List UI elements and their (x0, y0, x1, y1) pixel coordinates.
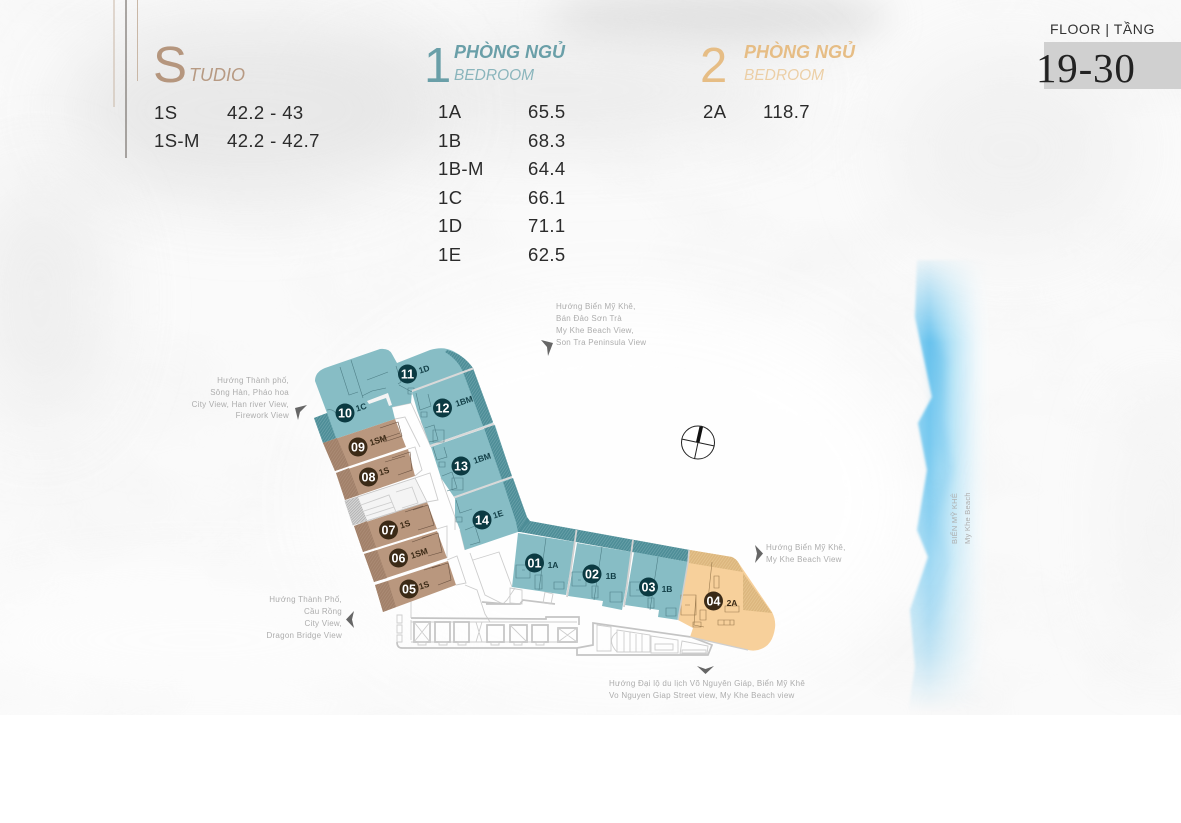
unit markers: 1BM (454, 394, 474, 409)
unit markers: 1S (378, 465, 391, 478)
studio areas: 1S-M (154, 130, 200, 151)
view label: Vo Nguyen Giap street: Hướng Đại lộ du lịch Võ Nguyên Giáp, Biển Mỹ Khê (609, 679, 805, 688)
panel: 1 bedroom legend (424, 39, 566, 265)
1 bedroom areas: 1A (438, 101, 462, 122)
unit markers: 13 (454, 460, 468, 474)
2 bedroom area: 118.7 (763, 101, 810, 122)
arrow: north-east view (541, 340, 553, 356)
view label: city and Han river: City View, Han river View, (192, 400, 289, 409)
beach label: BIỂN MỸ KHÊ (950, 493, 959, 544)
view label: Dragon Bridge: Cầu Rồng (304, 607, 342, 616)
units 01 02 03 (512, 517, 690, 620)
unit 11 1D (392, 348, 473, 407)
1 bedroom areas: 1E (438, 244, 461, 265)
unit markers: 06 (392, 552, 405, 566)
1 bedroom areas: 1D (438, 215, 462, 236)
unit markers: 04 (707, 594, 720, 608)
unit markers: 10 (338, 406, 352, 420)
heading: 1 bedroom: 1 (424, 39, 451, 93)
unit markers: 1SM (368, 433, 388, 448)
view label: Vo Nguyen Giap street (609, 679, 805, 700)
unit markers: 11 (401, 368, 414, 382)
unit markers: 05 (402, 582, 416, 596)
view label: Son Tra: My Khe Beach View, (556, 326, 634, 335)
view label: My Khe Beach (766, 543, 846, 564)
unit markers: 1D (417, 363, 431, 376)
unit markers: 01 (528, 556, 541, 570)
view label: Son Tra: Hướng Biển Mỹ Khê, (556, 302, 636, 311)
studio areas (154, 102, 320, 151)
heading: 2 bedroom: PHÒNG NGỦ (744, 41, 856, 62)
beach label (950, 492, 972, 544)
heading: 2 bedroom: BEDROOM (744, 67, 824, 84)
heading: 1 bedroom: BEDROOM (454, 67, 534, 84)
2 bedroom area: 2A (703, 101, 727, 122)
1 bedroom areas: 71.1 (528, 215, 566, 236)
stair and service walls (510, 588, 708, 654)
view label: Dragon Bridge: City View, (305, 619, 342, 628)
floor badge (1036, 21, 1181, 91)
view label: Dragon Bridge (266, 595, 342, 640)
1 bedroom areas: 62.5 (528, 244, 566, 265)
view label: Son Tra (556, 302, 646, 347)
lift lobby walls (397, 617, 712, 655)
unit markers: 12 (436, 402, 449, 416)
view label: Dragon Bridge: Dragon Bridge View (266, 631, 342, 640)
studio areas: 1S (154, 102, 177, 123)
view label: My Khe Beach: Hướng Biển Mỹ Khê, (766, 543, 846, 552)
1 bedroom areas: 64.4 (528, 158, 566, 179)
compass (682, 426, 714, 459)
heading: 1 bedroom (424, 39, 566, 93)
arrow: west view (346, 611, 354, 628)
sea watercolour (909, 260, 978, 703)
unit markers: 14 (475, 514, 489, 528)
units 12 13 14 and balcony strip (412, 368, 527, 550)
view label: city and Han river: Hướng Thành phố, (217, 376, 289, 385)
panel: studio legend (153, 36, 320, 151)
view label: Dragon Bridge: Hướng Thành Phố, (269, 595, 342, 604)
unit markers: 2A (727, 598, 737, 608)
view label: My Khe Beach: My Khe Beach View (766, 555, 842, 564)
unit markers: 07 (382, 524, 395, 538)
studio areas: 42.2 - 43 (227, 102, 304, 123)
heading: 1 bedroom: PHÒNG NGỦ (454, 41, 566, 62)
unit markers: 1B (606, 571, 616, 581)
unit markers: 09 (351, 440, 365, 454)
view label: Vo Nguyen Giap street: Vo Nguyen Giap Street view, My Khe Beach view (609, 691, 795, 700)
floor plan (314, 348, 775, 655)
1 bedroom areas: 66.1 (528, 187, 566, 208)
1 bedroom areas: 1B (438, 130, 461, 151)
unit markers: 1C (354, 401, 368, 414)
heading: 2 bedroom (700, 39, 856, 93)
unit 04 2A (678, 550, 775, 651)
floor badge: 19-30 (1036, 45, 1136, 91)
unit markers: 1BM (472, 451, 492, 466)
1 bedroom areas (438, 101, 566, 265)
studio areas: 42.2 - 42.7 (227, 130, 320, 151)
unit markers: 1E (492, 508, 505, 521)
1 bedroom areas: 1B-M (438, 158, 484, 179)
arrow: south view (697, 666, 714, 674)
panel: 2 bedroom legend (700, 39, 856, 122)
unit markers: 02 (585, 568, 599, 582)
unit markers: 03 (642, 580, 655, 594)
beach label: My Khe Beach (963, 492, 972, 544)
unit markers: 1SM (409, 546, 429, 561)
view label: city and Han river: Sông Hàn, Pháo hoa (210, 388, 289, 397)
stair core (345, 478, 427, 525)
heading: studio: S (153, 36, 187, 93)
2 bedroom area (703, 101, 810, 122)
view label: city and Han river: Firework View (236, 411, 289, 420)
heading: 2 bedroom: 2 (700, 39, 727, 93)
view label: Son Tra: Son Tra Peninsula View (556, 338, 646, 347)
unit markers: 08 (362, 470, 375, 484)
unit markers: 1A (548, 560, 558, 570)
unit markers: 1S (399, 518, 412, 531)
decorative vertical rules (114, 0, 138, 158)
view label: city and Han river (192, 376, 289, 420)
1 bedroom areas: 1C (438, 187, 462, 208)
unit markers (336, 363, 737, 610)
units 05 to 09 studio (323, 419, 456, 612)
1 bedroom areas: 68.3 (528, 130, 566, 151)
arrow: east view (755, 545, 763, 563)
heading: studio (153, 36, 245, 93)
arrow: north-west view (295, 405, 307, 420)
floor badge: FLOOR | TẦNG (1050, 21, 1155, 37)
unit markers: 1B (662, 584, 672, 594)
1 bedroom areas: 65.5 (528, 101, 566, 122)
heading: studio: TUDIO (189, 65, 245, 85)
view label: Son Tra: Bán Đảo Sơn Trà (556, 314, 622, 323)
unit 10 1C (314, 349, 403, 443)
core and corridor walls (392, 403, 712, 655)
unit markers: 1S (418, 579, 431, 592)
